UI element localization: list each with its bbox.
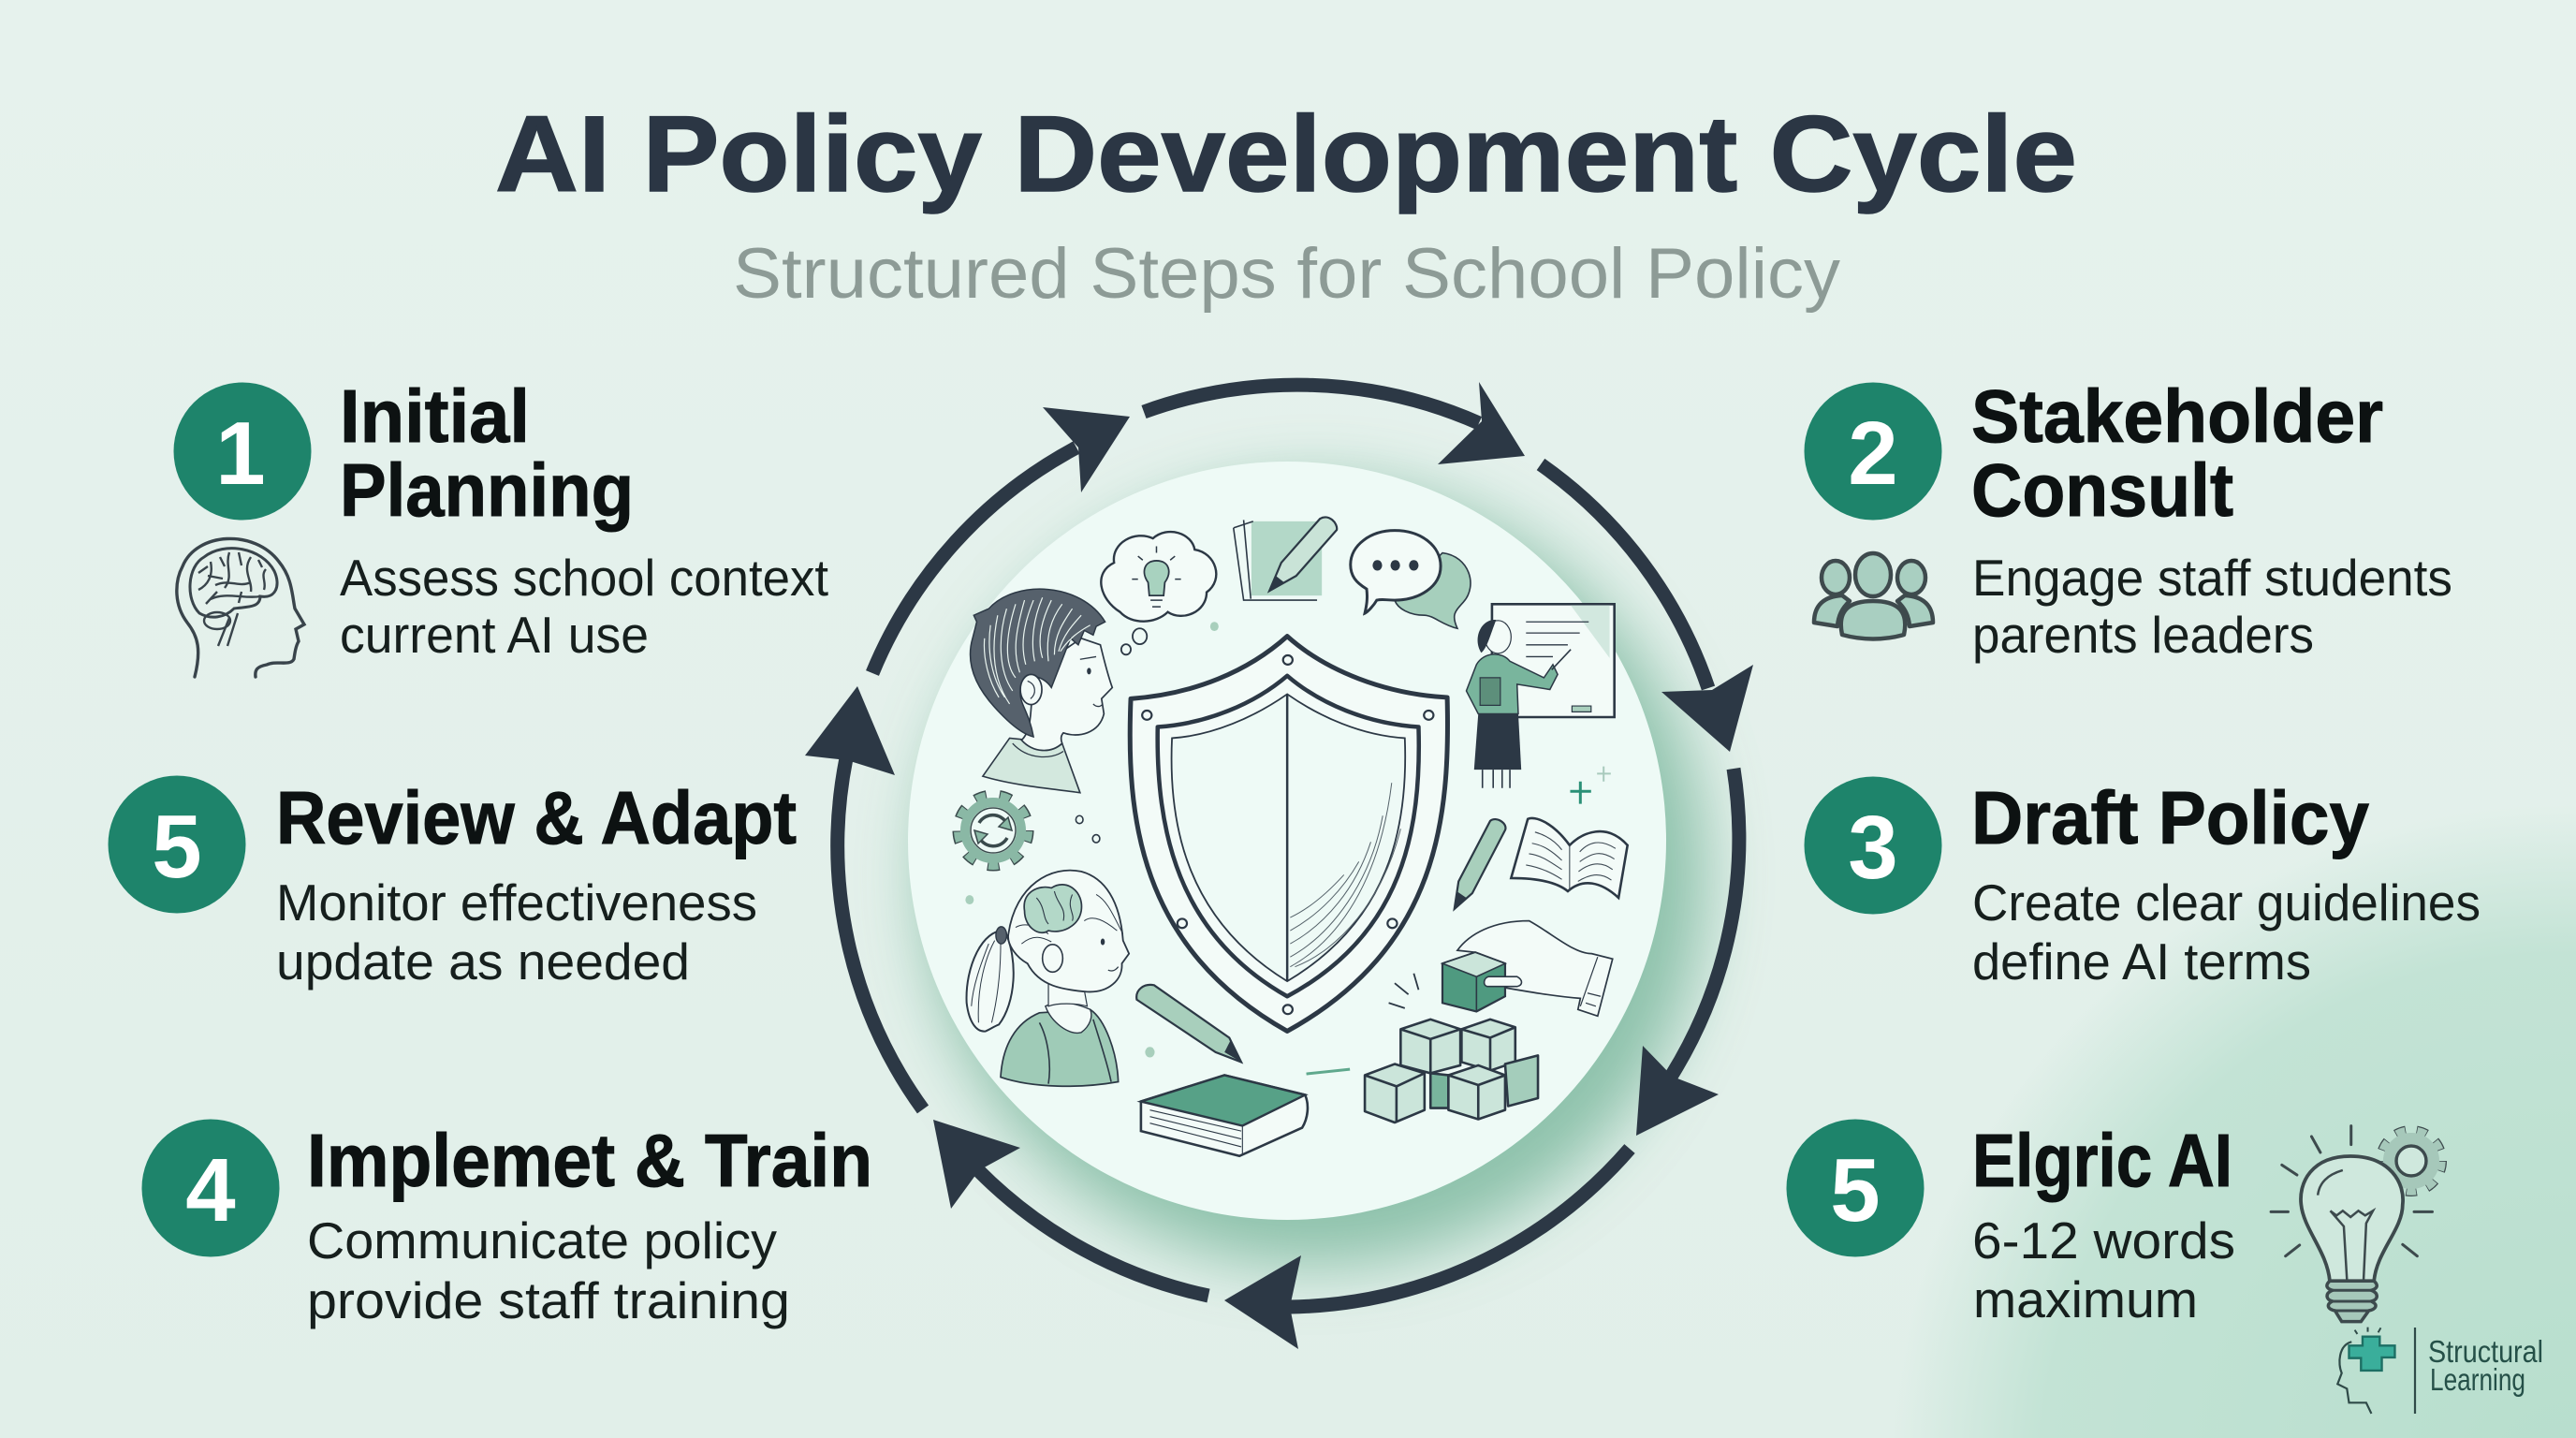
decorative accent dash (1307, 1069, 1350, 1074)
number badge 2 (1805, 382, 1941, 521)
title: AI Policy Development Cycle (495, 95, 2077, 214)
step 1: initial planning (174, 374, 828, 677)
description: provide staff training (307, 1271, 790, 1329)
subtitle: Structured Steps for School Policy (733, 234, 1840, 314)
step 3: draft policy (1805, 776, 2481, 990)
description: Monitor effectiveness (276, 873, 757, 932)
step 2: stakeholder consult (1805, 374, 2452, 664)
number badge 4: 4 (185, 1140, 236, 1240)
icon: hand placing cube (1442, 921, 1613, 1016)
heading: Implemet & Train (307, 1119, 872, 1202)
icon: teacher at board (1467, 604, 1615, 788)
icon: spark lines (1389, 974, 1418, 1008)
description: Communicate policy (307, 1211, 777, 1269)
heading: Stakeholder (1971, 374, 2383, 458)
icon: thought cloud with lightbulb (1101, 532, 1216, 654)
number badge 5: 5 (1830, 1140, 1881, 1240)
heading: Initial (340, 374, 530, 458)
central disc (908, 462, 1705, 1266)
description: parents leaders (1972, 606, 2314, 664)
description: Create clear guidelines (1972, 873, 2481, 932)
number badge 5: 5 (152, 797, 202, 897)
icon: lightbulb and gear (2271, 1126, 2441, 1322)
icon: pencil upright (1455, 819, 1505, 909)
arrow: step 4 to review (933, 1120, 1208, 1296)
decorative dots (965, 622, 1219, 1058)
icon: plus signs (1570, 767, 1611, 804)
number badge 3 (1805, 777, 1941, 914)
logo text: Learning (2430, 1362, 2525, 1397)
arrow: review to step 1 (805, 686, 923, 1109)
arrow: step 2 to 3 (1541, 464, 1753, 752)
arrow: step 3 to elgric (1636, 769, 1739, 1136)
description: current AI use (340, 606, 649, 664)
heading: Planning (340, 448, 634, 532)
step 5: review and adapt (109, 775, 797, 990)
description: Engage staff students (1972, 549, 2452, 607)
number badge 1 (174, 382, 311, 521)
description: 6-12 words (1972, 1211, 2235, 1269)
icon: brain in head (177, 538, 304, 677)
number badge 4 (142, 1120, 279, 1256)
icon: closed book (1141, 1075, 1308, 1156)
icon: speech bubbles (1351, 531, 1471, 628)
description: update as needed (276, 932, 690, 990)
arrow: step 1 to 2 (1144, 382, 1525, 464)
icon: gear with arrows (959, 797, 1027, 864)
icon: shield (1130, 637, 1448, 1031)
heading: Draft Policy (1971, 776, 2369, 859)
icon: open book (1511, 818, 1628, 898)
heading: Elgric AI (1972, 1119, 2232, 1202)
number badge 2: 2 (1848, 404, 1898, 504)
heading: Review & Adapt (276, 776, 797, 859)
number badge 3: 3 (1848, 798, 1898, 898)
description: maximum (1973, 1270, 2198, 1328)
icon: people group (1814, 553, 1933, 638)
number badge 5 (1786, 1120, 1925, 1256)
icon: notes and pencil (1234, 517, 1337, 600)
icon: pencil diagonal (1136, 985, 1241, 1062)
icon: head with cross (2337, 1328, 2394, 1414)
description: define AI terms (1972, 932, 2311, 990)
logo: structural learning (2337, 1328, 2543, 1414)
description: Assess school context (340, 549, 828, 607)
arrow: elgric to step 4 (1224, 1149, 1630, 1349)
number badge 5 (109, 775, 245, 914)
arrow: step 1 return (872, 407, 1130, 673)
logo text: Structural (2428, 1334, 2543, 1369)
cycle arrows (805, 382, 1753, 1349)
step 5: elgric ai (1786, 1119, 2235, 1328)
heading: Consult (1971, 448, 2233, 532)
logo divider (2414, 1328, 2416, 1414)
icon: girl (967, 871, 1129, 1086)
step 4: implement and train (142, 1119, 872, 1329)
central illustrations (965, 517, 1628, 1156)
number badge 1: 1 (215, 404, 266, 504)
icon: boy (970, 589, 1112, 793)
icon: stacked cubes (1365, 1020, 1538, 1123)
